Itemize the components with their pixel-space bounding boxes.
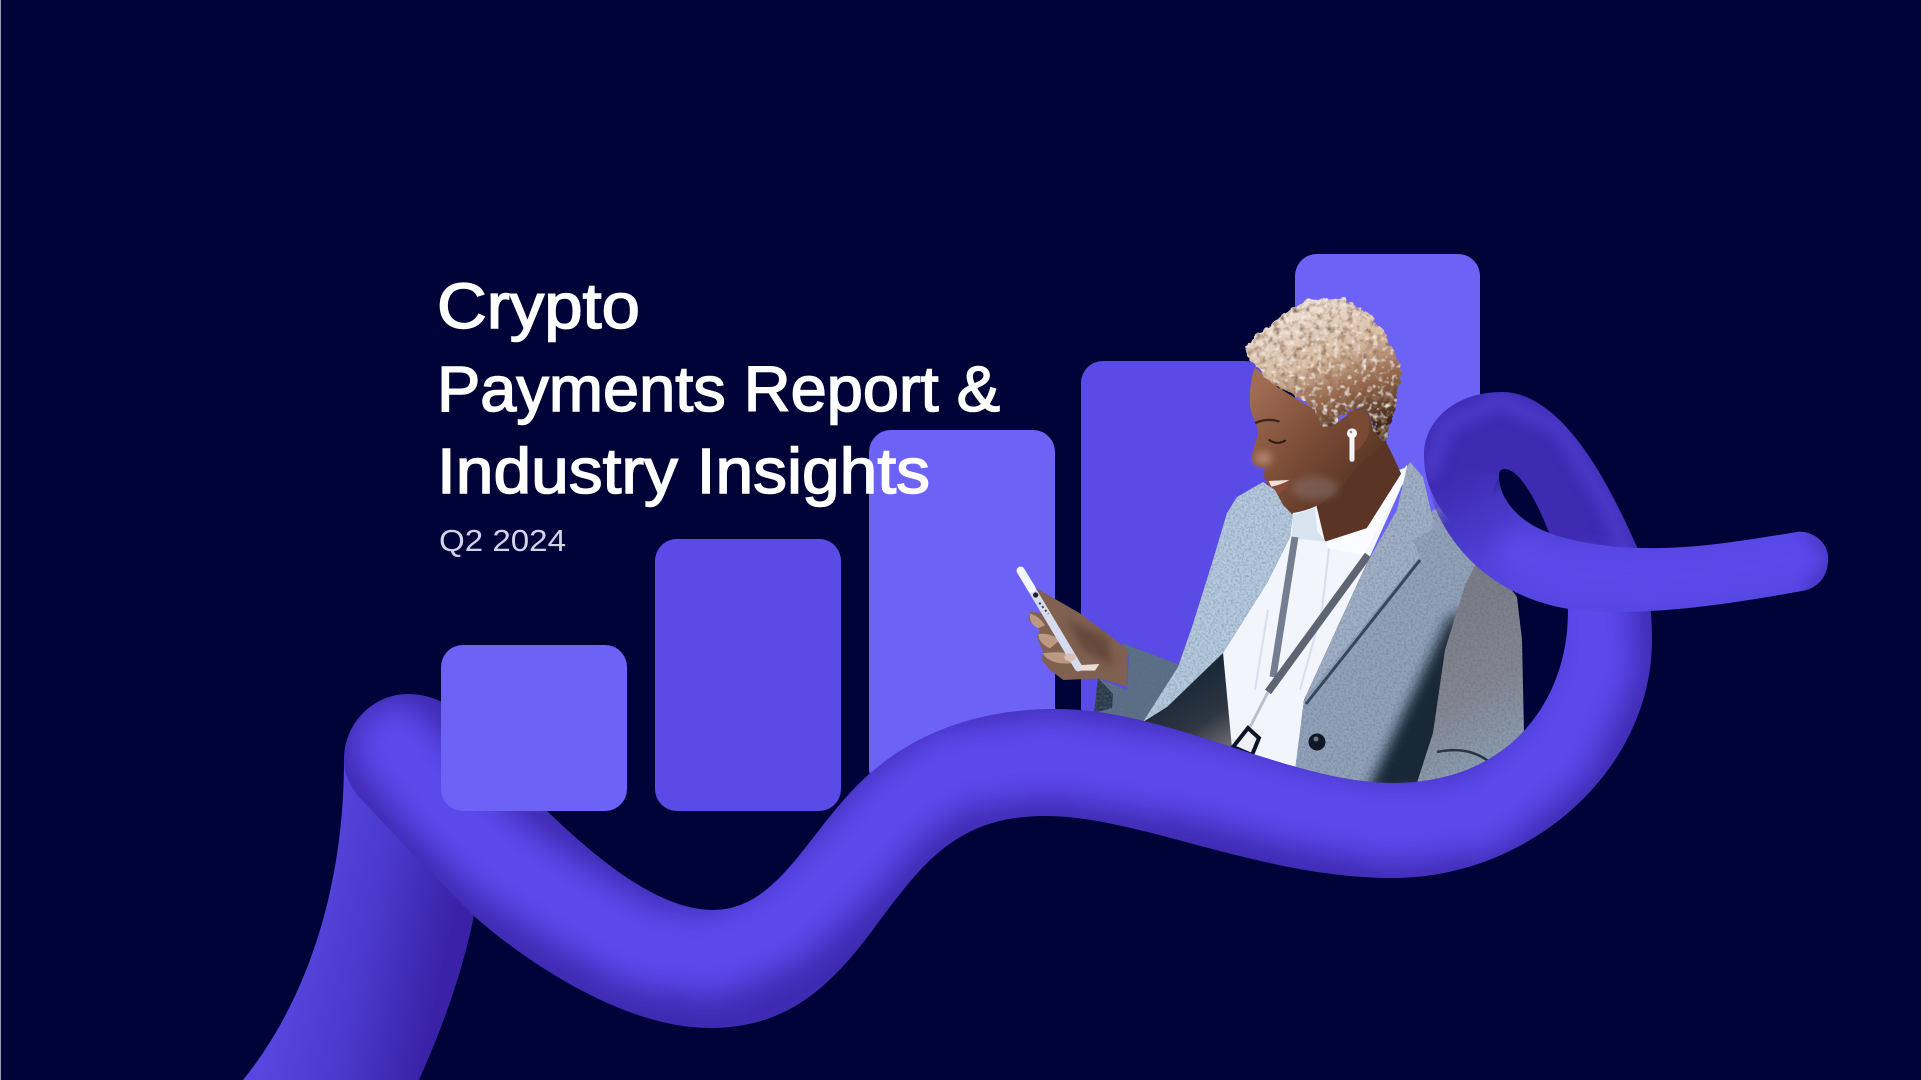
bar 5 — [1295, 254, 1480, 560]
earbud — [1347, 428, 1357, 459]
ribbon: tail from bottom-left — [243, 760, 480, 1080]
button — [1308, 734, 1326, 750]
person with phone — [1021, 298, 1524, 795]
bar 2 — [655, 539, 841, 811]
title: Crypto — [437, 270, 640, 342]
shirt placket — [1255, 548, 1329, 690]
eyebrow — [1256, 420, 1279, 423]
phone — [1021, 571, 1078, 667]
fingers — [1030, 613, 1075, 664]
jacket lining — [1143, 653, 1232, 748]
thumb — [1080, 664, 1099, 671]
lanyard clasp and badge — [1233, 692, 1268, 755]
bar 4 — [1081, 361, 1267, 791]
hand — [1021, 571, 1128, 687]
jacket left panel — [1143, 482, 1293, 722]
collar right — [1327, 465, 1409, 555]
head and neck — [1245, 298, 1409, 555]
ear — [1347, 410, 1369, 451]
bar 1 — [441, 645, 627, 811]
face — [1250, 367, 1385, 513]
lapel shadow — [1306, 560, 1420, 704]
jacket body shadow — [1365, 610, 1462, 795]
sleeve fold — [1437, 750, 1492, 764]
fingernail — [1064, 653, 1076, 661]
hair — [1245, 298, 1403, 443]
ribbon: main wave and riser — [344, 392, 1652, 1028]
jacket sleeve, right — [1413, 560, 1524, 795]
shirt — [1223, 467, 1407, 775]
palm shadow — [1067, 620, 1113, 667]
jacket body — [1295, 505, 1495, 795]
collar left — [1292, 508, 1326, 542]
teeth — [1269, 480, 1289, 487]
face shading — [1292, 476, 1338, 500]
jacket lapel — [1304, 462, 1433, 700]
title: Payments Report & — [437, 353, 1000, 425]
subtitle: date: Q2 2024 — [439, 523, 566, 558]
title: Industry Insights — [437, 435, 930, 507]
lips — [1267, 479, 1291, 496]
title — [437, 270, 1000, 507]
lanyard strap left — [1273, 537, 1295, 677]
ribbon: loop and horizontal end — [1430, 476, 1828, 612]
nose highlight — [1255, 452, 1272, 465]
eye — [1269, 440, 1285, 443]
neck — [1317, 440, 1404, 542]
jacket sleeve, forearm — [1094, 643, 1180, 730]
bar 3 — [869, 430, 1055, 790]
lanyard strap right — [1268, 555, 1368, 692]
